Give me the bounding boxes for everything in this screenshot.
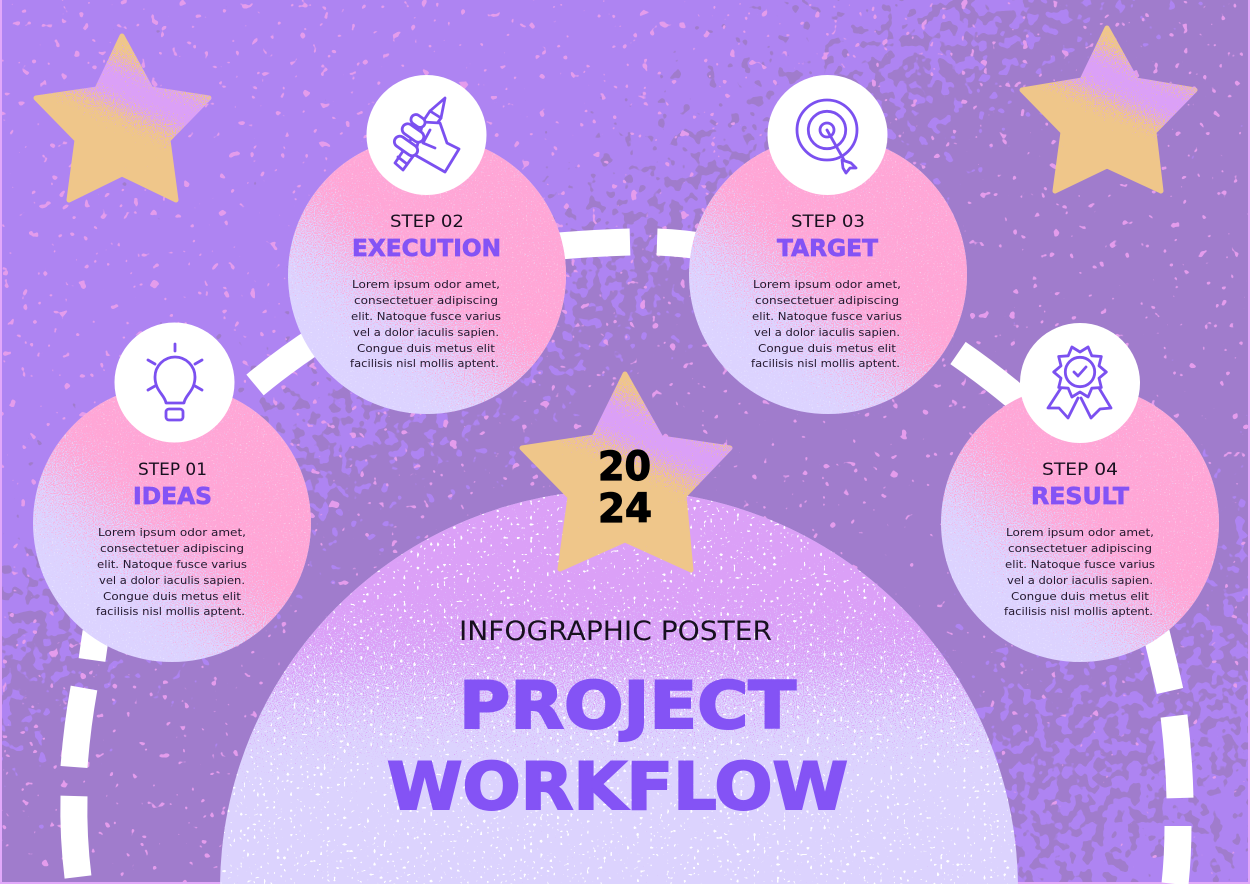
- text: step 01: facilisis nisl mollis aptent.: [96, 605, 245, 618]
- text: step 04: RESULT: [1031, 484, 1129, 510]
- dashed white workflow arc: [74, 242, 1180, 884]
- star: top left: [34, 34, 212, 202]
- text: step 04: consectetuer adipiscing: [1008, 542, 1152, 555]
- panel: step 04 result: [941, 323, 1219, 662]
- text: step 02: STEP 02: [390, 212, 464, 232]
- text: step 03: Congue duis metus elit: [758, 342, 897, 355]
- text: step 02: consectetuer adipiscing: [354, 294, 498, 307]
- text: step 01: vel a dolor iaculis sapien.: [99, 574, 245, 587]
- star: center with year: 20: [598, 444, 651, 490]
- text: step 02: facilisis nisl mollis aptent.: [350, 357, 499, 370]
- title: project workflow: [387, 669, 848, 825]
- text: step 03: elit. Natoque fusce varius: [752, 310, 902, 323]
- text: step 03: vel a dolor iaculis sapien.: [754, 326, 900, 339]
- title: project workflow: PROJECT: [459, 669, 796, 744]
- icon: target with arrow: [797, 100, 857, 173]
- dome: title panel: [220, 494, 1018, 884]
- title: project workflow: WORKFLOW: [387, 750, 848, 825]
- text: step 01: IDEAS: [133, 484, 212, 510]
- text: step 01: [96, 460, 247, 618]
- text: step 02: [350, 212, 501, 370]
- star: top right: [1020, 26, 1198, 194]
- text: step 04: Lorem ipsum odor amet,: [1006, 526, 1154, 539]
- star: center with year: [520, 372, 732, 572]
- text: step 02: elit. Natoque fusce varius: [351, 310, 501, 323]
- text: step 04: Congue duis metus elit: [1011, 590, 1150, 603]
- text: step 03: STEP 03: [791, 212, 865, 232]
- text: step 03: [751, 212, 902, 370]
- text: step 01: elit. Natoque fusce varius: [97, 558, 247, 571]
- text: step 01: Congue duis metus elit: [103, 590, 242, 603]
- text: step 04: STEP 04: [1042, 460, 1118, 480]
- text: step 02: EXECUTION: [352, 236, 501, 262]
- icon: award rosette: [1048, 347, 1111, 418]
- subtitle: INFOGRAPHIC POSTER: [459, 616, 772, 647]
- star: center with year: 24: [598, 486, 652, 532]
- icon: light bulb: [148, 344, 202, 420]
- text: step 04: vel a dolor iaculis sapien.: [1007, 574, 1153, 587]
- text: step 04: elit. Natoque fusce varius: [1005, 558, 1155, 571]
- icon: hand holding pencil: [392, 98, 459, 172]
- text: step 03: Lorem ipsum odor amet,: [753, 278, 901, 291]
- panel: step 02 execution: [288, 75, 566, 414]
- text: step 02: vel a dolor iaculis sapien.: [353, 326, 499, 339]
- text: step 03: facilisis nisl mollis aptent.: [751, 357, 900, 370]
- text: step 03: consectetuer adipiscing: [755, 294, 899, 307]
- text: step 01: Lorem ipsum odor amet,: [98, 526, 246, 539]
- panel: step 03 target: [689, 75, 967, 414]
- text: step 01: STEP 01: [138, 460, 207, 480]
- text: step 03: TARGET: [777, 236, 878, 262]
- panel: step 01 ideas: [33, 322, 311, 662]
- text: step 01: consectetuer adipiscing: [100, 542, 244, 555]
- text: step 02: Lorem ipsum odor amet,: [352, 278, 500, 291]
- text: step 04: [1004, 460, 1155, 618]
- text: step 02: Congue duis metus elit: [357, 342, 496, 355]
- text: step 04: facilisis nisl mollis aptent.: [1004, 605, 1153, 618]
